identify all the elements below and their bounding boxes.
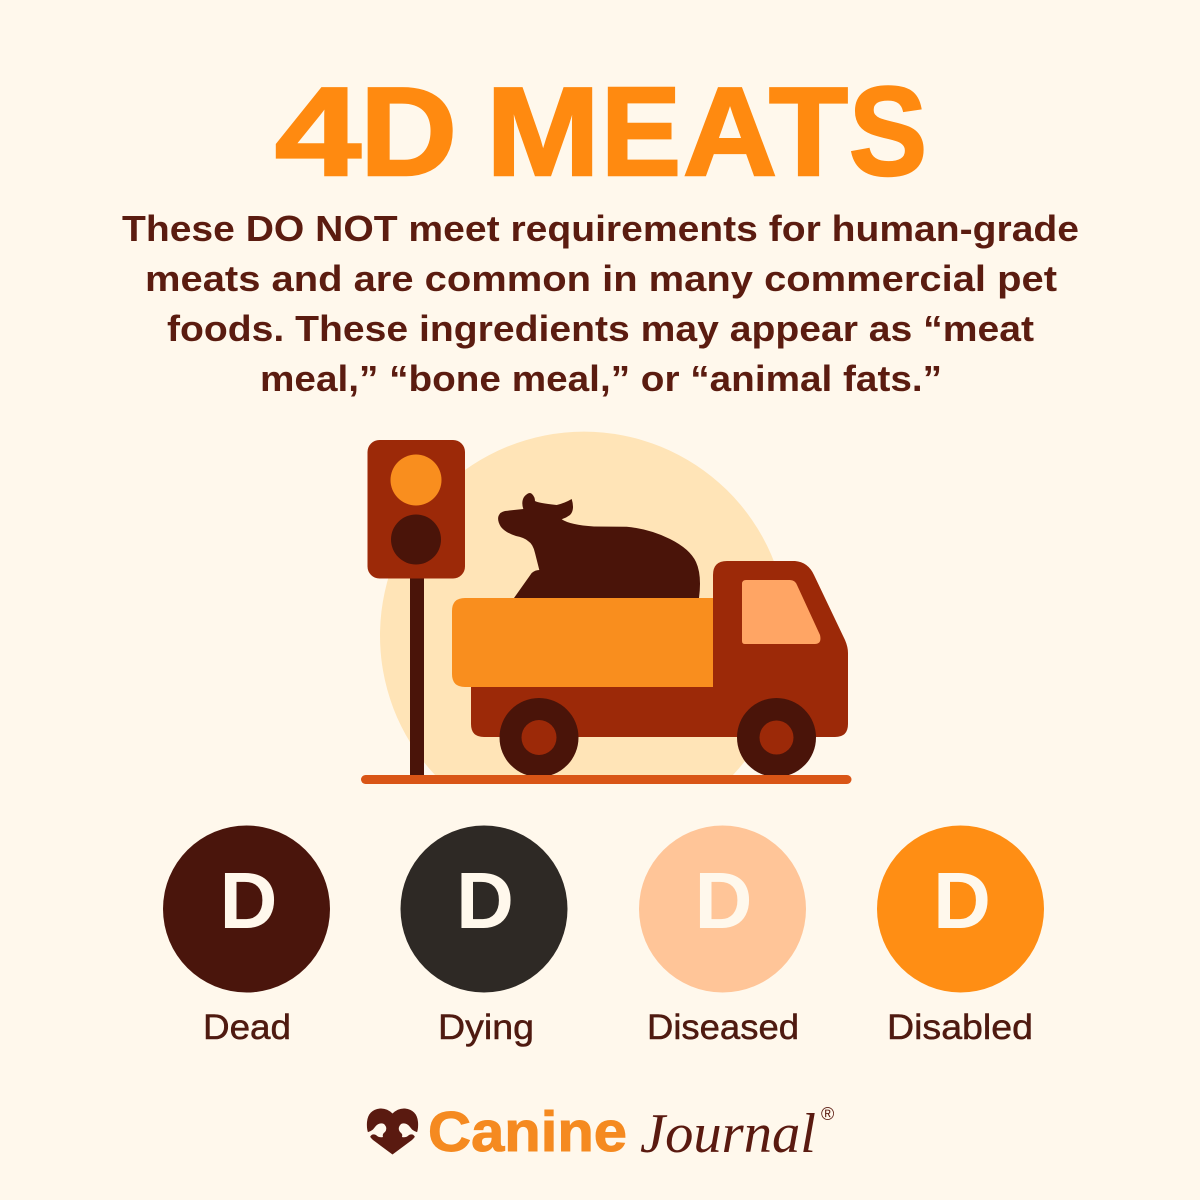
item: Dying: D	[456, 856, 514, 945]
truck window	[742, 580, 820, 644]
icon: heart with dog nose	[364, 1108, 421, 1154]
truck	[452, 561, 848, 777]
title: D	[360, 61, 457, 202]
description text: meal,” “bone meal,” or “animal fats.”	[260, 358, 942, 399]
title: S	[849, 61, 927, 202]
title: E	[601, 61, 681, 202]
item: Dead	[163, 826, 330, 1047]
registered mark: ®	[821, 1104, 834, 1124]
item: Disabled: D	[933, 856, 991, 945]
title: M	[486, 61, 600, 202]
truck cab and chassis	[471, 561, 848, 737]
logo	[364, 1100, 834, 1165]
illustration: truck carrying cow past traffic light	[361, 432, 852, 784]
title: 4	[275, 61, 361, 202]
ground line	[361, 775, 852, 784]
item: Dying	[400, 826, 568, 1047]
truck bed	[452, 598, 713, 687]
item: Diseased: Diseased	[647, 1008, 799, 1047]
item: Disabled: Disabled	[887, 1008, 1033, 1047]
item: Diseased	[639, 826, 806, 1047]
item: Disabled	[877, 826, 1044, 1047]
item: Diseased: D	[695, 856, 752, 945]
traffic light	[368, 440, 465, 776]
cow silhouette	[498, 493, 700, 598]
description text: foods. These ingredients may appear as “meat	[167, 308, 1034, 349]
description text: These DO NOT meet requirements for human-grade	[122, 208, 1079, 249]
front wheel	[737, 698, 816, 777]
title	[275, 61, 927, 202]
wordmark: Canine: Canine	[428, 1100, 627, 1164]
title: A	[683, 61, 777, 202]
wordmark: Journal: Journal	[640, 1103, 816, 1165]
sun backdrop	[380, 432, 788, 775]
description text	[122, 208, 1079, 399]
description text: meats and are common in many commercial pet	[145, 258, 1057, 299]
title: T	[769, 61, 848, 202]
item: Dead: Dead	[203, 1008, 291, 1047]
rear wheel	[500, 698, 578, 777]
item: Dying: Dying	[438, 1008, 534, 1047]
item: Dead: D	[220, 856, 277, 945]
